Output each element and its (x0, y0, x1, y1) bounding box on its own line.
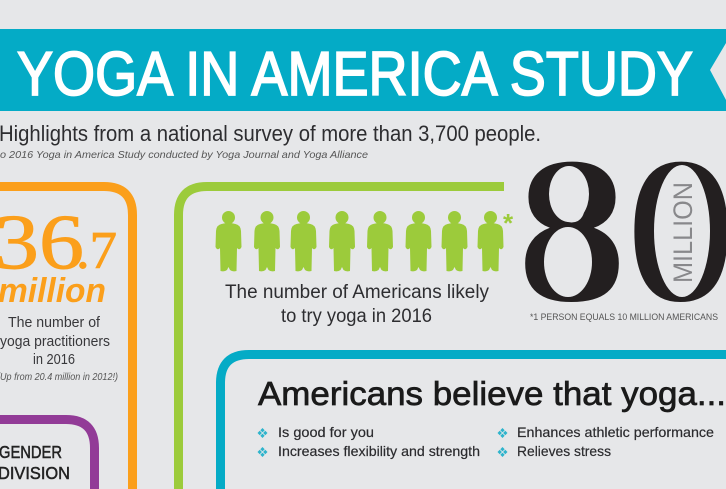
orange panel outline (0, 186, 132, 489)
panel: likely to try (178, 186, 514, 489)
icon: person 4 (329, 211, 355, 271)
big number: 80 million (518, 115, 726, 345)
belief list: Relieves stress (517, 443, 611, 459)
icon: person 3 (290, 211, 316, 271)
heading: Americans believe that yoga... (258, 375, 726, 412)
panel: practitioners (0, 186, 132, 489)
source note: o 2016 Yoga in America Study conducted by Yoga Journal and Yoga Alliance (0, 149, 368, 161)
title banner (0, 29, 726, 111)
description: to try yoga in 2016 (281, 306, 432, 327)
icon: person 7 (442, 211, 468, 271)
big number (0, 198, 117, 285)
panel: beliefs (220, 354, 726, 489)
asterisk: * (503, 208, 514, 238)
bullet icons (258, 428, 508, 457)
description (0, 315, 110, 368)
description: The number of (8, 315, 101, 331)
icon: person 8 (478, 211, 504, 271)
teal panel outline (220, 354, 726, 489)
people pictogram (216, 211, 504, 271)
icon: bullet 3 (498, 428, 508, 438)
million label: million (0, 272, 106, 310)
digit 8: 8 (518, 115, 626, 345)
icon: person 1 (216, 211, 242, 271)
panel: gender division (0, 420, 94, 489)
gender heading (0, 442, 70, 483)
description (225, 282, 489, 327)
icon: bullet 4 (498, 447, 508, 457)
description: in 2016 (33, 352, 75, 368)
growth note: (Up from 20.4 million in 2012!) (0, 372, 118, 383)
green panel outline (178, 186, 504, 489)
million vertical label: MILLION (668, 182, 698, 283)
icon: person 5 (367, 211, 393, 271)
belief list: Enhances athletic performance (517, 424, 714, 440)
icon: bullet 1 (258, 428, 268, 438)
description: The number of Americans likely (225, 282, 489, 303)
digit counters (544, 165, 710, 297)
icon: bullet 2 (258, 447, 268, 457)
icon: person 6 (406, 211, 432, 271)
purple panel outline (0, 420, 94, 489)
gender heading: GENDER (0, 442, 62, 462)
description: yoga practitioners (0, 334, 110, 350)
banner ribbon (0, 29, 726, 111)
belief list (278, 424, 714, 459)
belief list: Is good for you (278, 424, 374, 440)
subtitle: Highlights from a national survey of more than 3,700 people. (0, 121, 541, 146)
icon: person 2 (254, 211, 280, 271)
belief list: Increases flexibility and strength (278, 443, 480, 459)
gender heading: DIVISION (0, 463, 70, 483)
big number: .7 (76, 222, 117, 280)
